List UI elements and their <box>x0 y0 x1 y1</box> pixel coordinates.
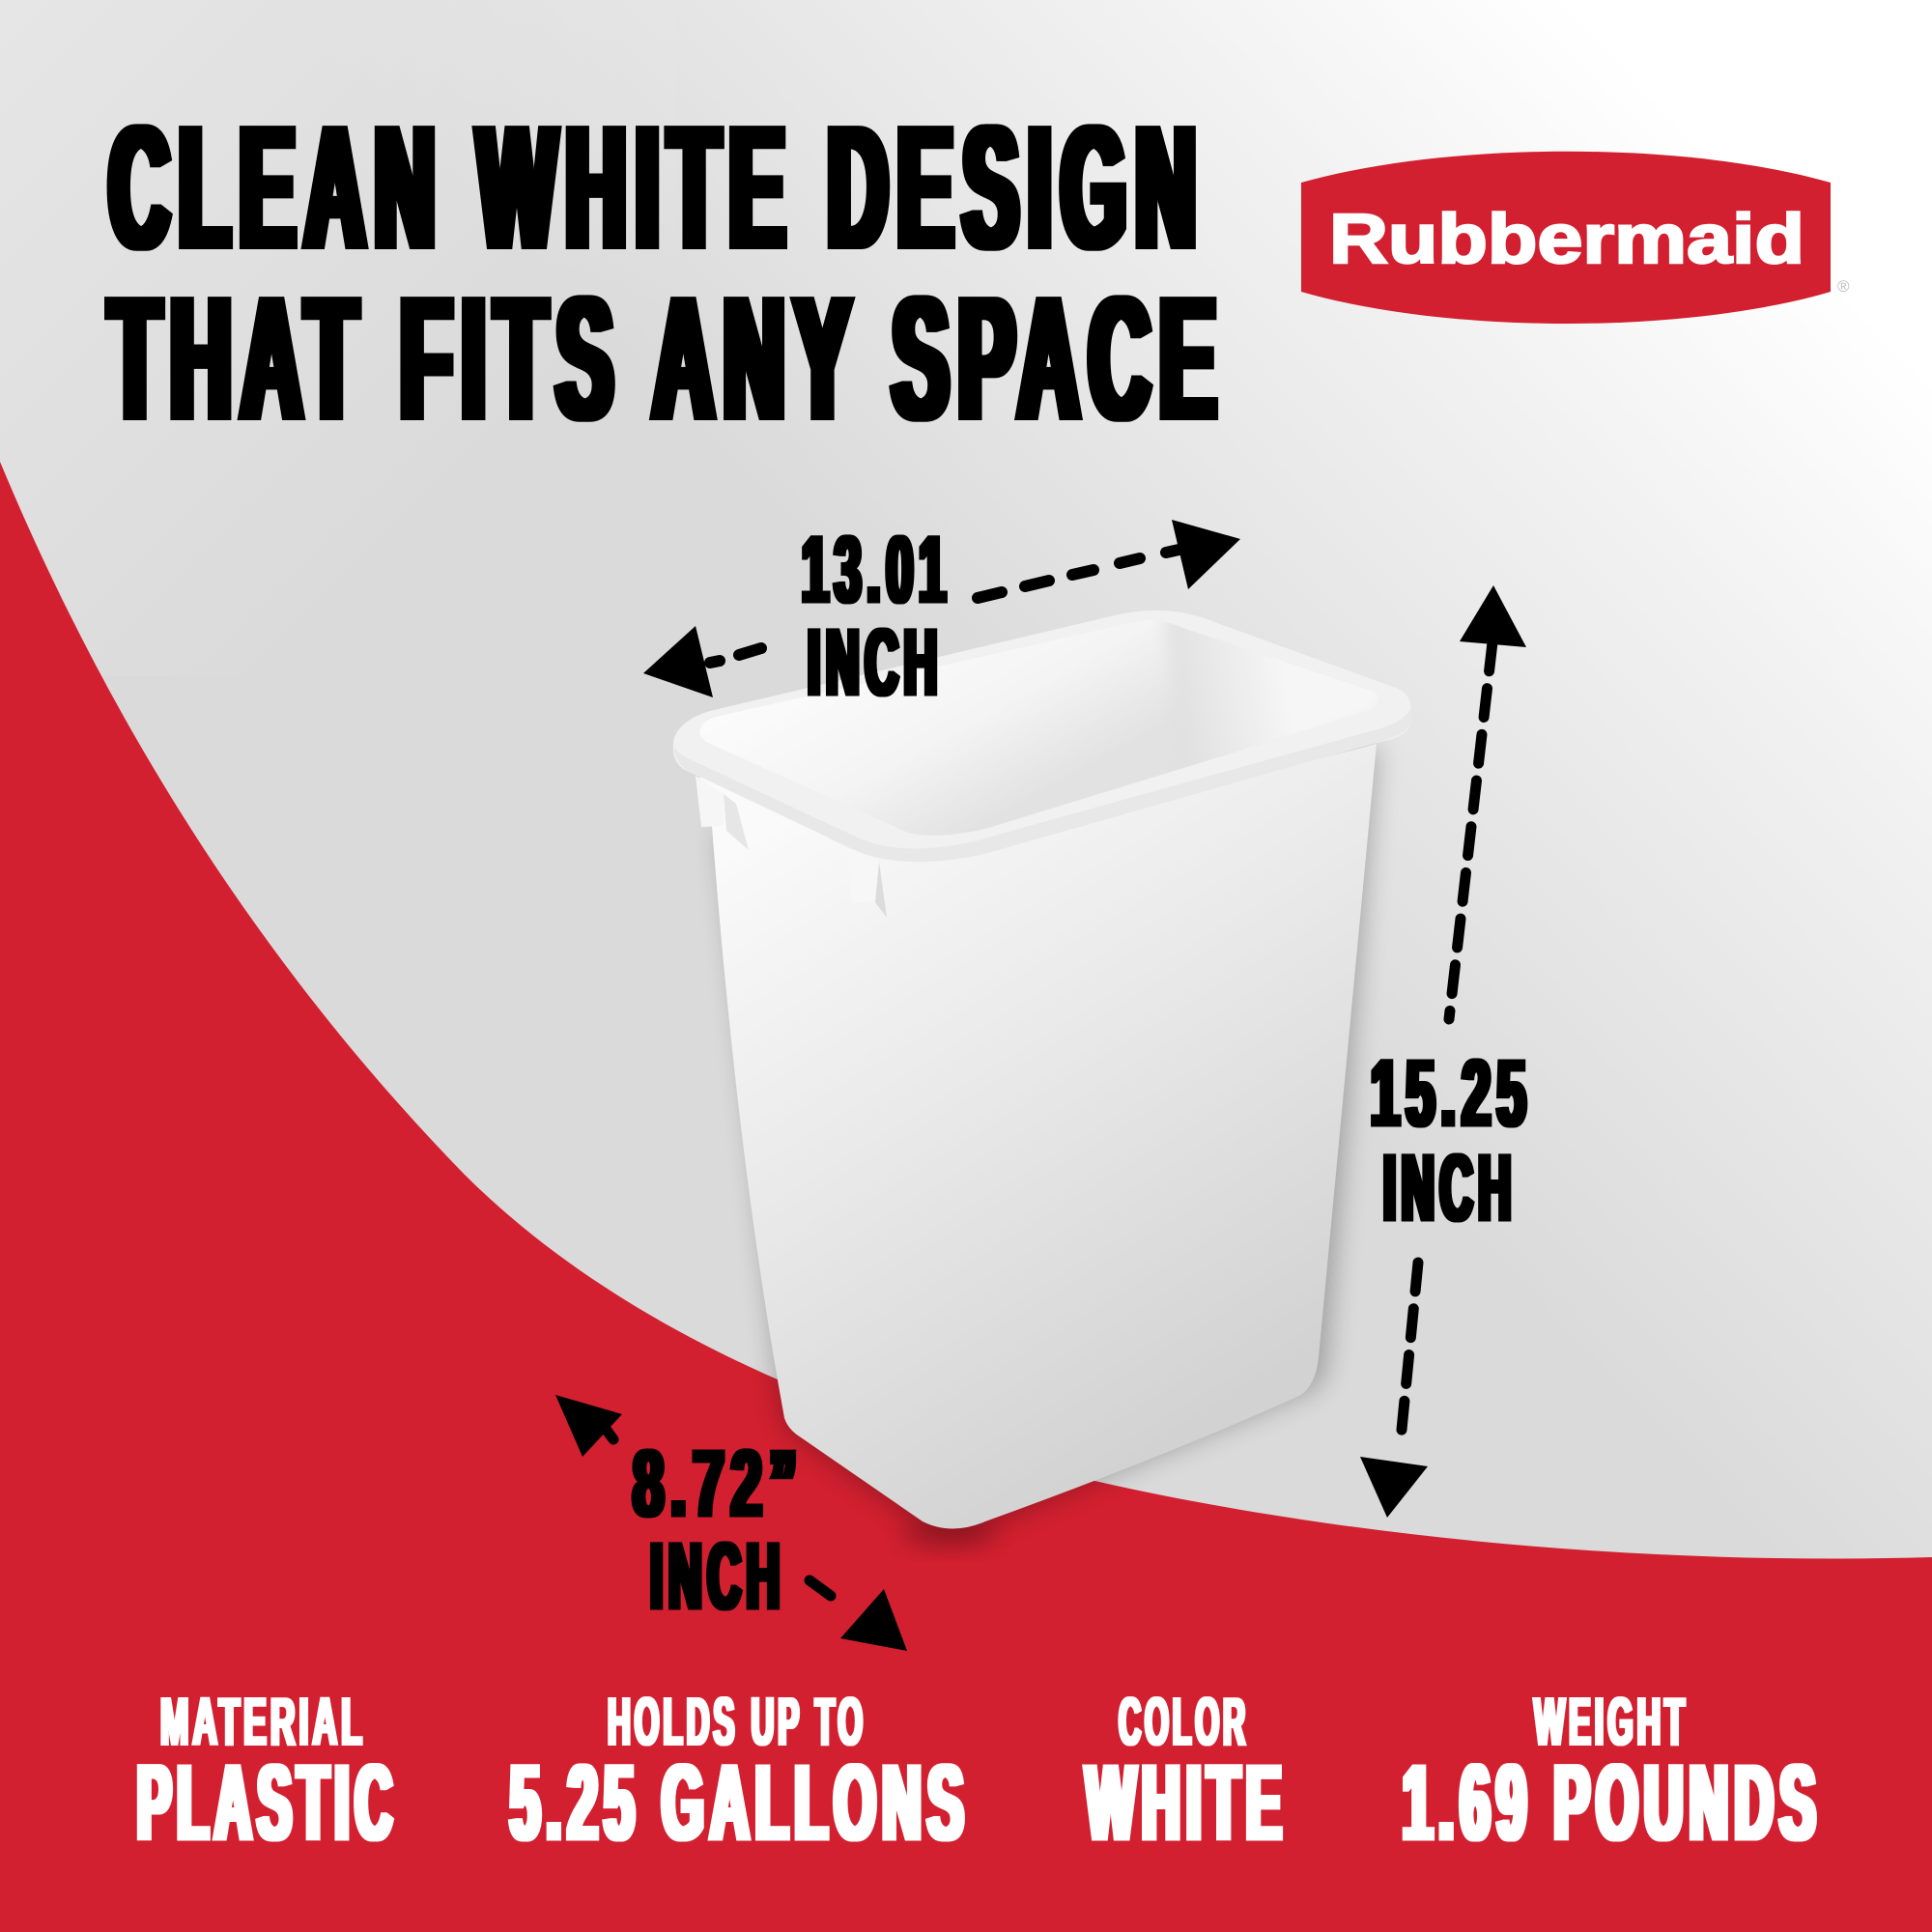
spec: weight <box>1403 1684 1822 1862</box>
spec: material <box>137 1684 398 1862</box>
dimension: width: 13.01 <box>802 517 952 622</box>
text: WHITE <box>1086 1744 1288 1862</box>
red curved panel <box>0 462 1932 1932</box>
logo: Rubbermaid <box>1301 152 1850 324</box>
dimension: height: 15.25 <box>1371 1040 1532 1146</box>
dimension: height <box>1360 585 1532 1518</box>
spec: capacity <box>510 1684 970 1862</box>
spec: color: COLOR <box>1119 1684 1249 1759</box>
product: white waste bin <box>673 609 1411 1548</box>
logo: Rubbermaid: ® <box>1837 277 1850 296</box>
spec: color <box>1086 1684 1288 1862</box>
logo: Rubbermaid: Rubbermaid <box>1329 201 1804 278</box>
dimension: width: INCH <box>808 610 943 715</box>
dimension: depth: 8.72” <box>633 1431 804 1536</box>
title <box>109 91 1226 456</box>
spec: material: MATERIAL <box>160 1684 366 1759</box>
spec: capacity: 5.25 GALLONS <box>510 1744 970 1862</box>
spec: capacity: HOLDS UP TO <box>608 1684 867 1759</box>
dimension: width <box>643 517 1240 715</box>
dimension: depth: INCH <box>650 1523 785 1629</box>
text: PLASTIC <box>137 1744 398 1862</box>
dimension: depth <box>555 1395 907 1651</box>
dimension: height: INCH <box>1383 1135 1517 1240</box>
spec: weight: WEIGHT <box>1534 1684 1689 1759</box>
